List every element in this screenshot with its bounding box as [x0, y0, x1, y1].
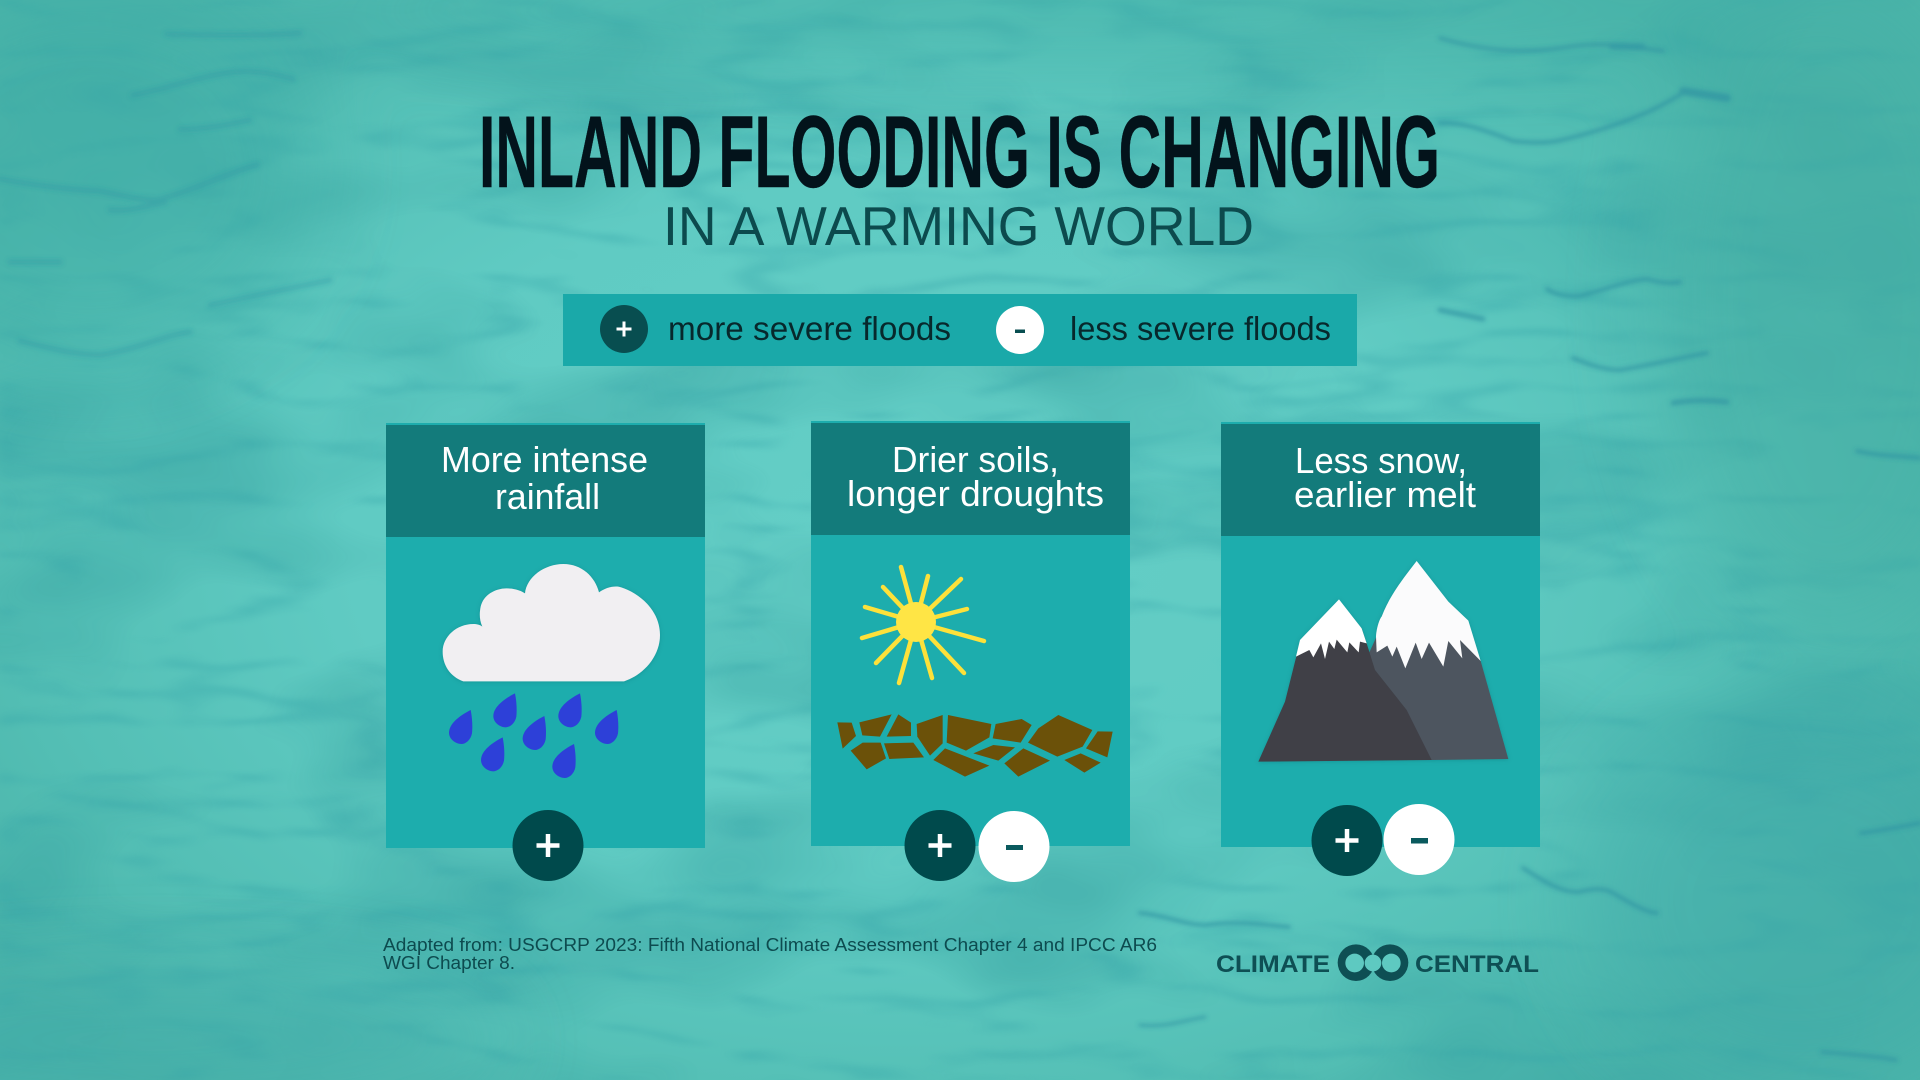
heading: less snow, earlier melt: Less snow,	[1295, 440, 1467, 481]
icon: plus badge	[1312, 805, 1382, 876]
legend: more severe floods: more severe floods	[668, 310, 951, 347]
legend: plus icon	[600, 305, 648, 353]
heading: more intense rainfall: rainfall	[495, 476, 600, 517]
icon: plus badge	[904, 810, 976, 881]
heading: drier soils, longer droughts: Drier soils,	[892, 439, 1059, 480]
subtitle: IN A WARMING WORLD	[663, 195, 1254, 257]
icon: rain drops	[449, 693, 618, 778]
logo: climate central: CLIMATE	[1216, 951, 1330, 978]
icon: plus badge	[512, 810, 584, 881]
heading: less snow, earlier melt	[1294, 440, 1476, 515]
panel: more intense rainfall	[386, 423, 705, 881]
icon: sun	[862, 567, 984, 683]
heading: more intense rainfall	[441, 439, 648, 517]
panel header: droughts	[811, 423, 1130, 535]
logo: climate central: CENTRAL	[1415, 951, 1539, 978]
heading: less snow, earlier melt: earlier melt	[1294, 474, 1476, 515]
legend: less severe floods: less severe floods	[1070, 310, 1331, 347]
panel: drier soils	[811, 421, 1130, 882]
panel header: snow	[1221, 424, 1540, 536]
heading: drier soils, longer droughts: longer droughts	[847, 473, 1104, 514]
panel: less snow	[1221, 422, 1540, 876]
source note: Adapted from: USGCRP 2023: Fifth National Climate Assessment Chapter 4 and IPCC AR6	[383, 935, 1157, 955]
heading: more intense rainfall: More intense	[441, 439, 648, 480]
panel header: rainfall	[386, 425, 705, 537]
source note: WGI Chapter 8.	[383, 953, 515, 973]
heading: drier soils, longer droughts	[847, 439, 1104, 514]
icon: cracked soil	[837, 714, 1113, 777]
icon: minus badge	[978, 811, 1050, 882]
icon: snowy mountains	[1258, 561, 1508, 762]
title	[479, 95, 1440, 257]
icon: minus badge	[1384, 804, 1454, 875]
logo: climate central	[1216, 944, 1539, 981]
legend: minus icon	[996, 306, 1044, 354]
icon: cloud	[443, 564, 660, 681]
legend panel	[563, 294, 1357, 366]
source note	[383, 935, 1157, 973]
